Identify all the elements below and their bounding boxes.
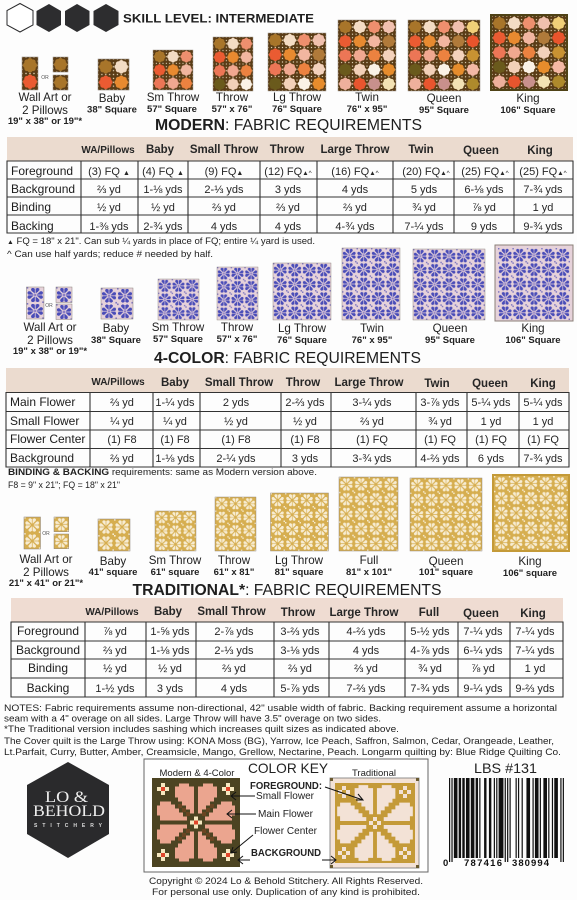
table: modern requirements: 4-¾ yds	[335, 221, 375, 233]
table: traditional requirements: WA/Pillows	[85, 607, 139, 618]
table: modern requirements: 6-⅛ yds	[464, 184, 504, 196]
copyright text: Copyright © 2024 Lo & Behold Stitchery. All Rights Reserved.	[149, 876, 423, 887]
table: 4-color requirements: ⅔ yd	[360, 416, 384, 428]
table: traditional requirements: ½ yd	[158, 663, 182, 675]
panel: color key	[144, 759, 428, 872]
table: modern requirements: ½ yd	[151, 202, 175, 214]
heading: modern: MODERN: FABRIC REQUIREMENTS	[155, 117, 422, 134]
modern quilt size row: Twin	[355, 91, 379, 104]
product code: LBS #131	[474, 760, 537, 776]
table: 4-color requirements: 2-¼ yds	[216, 453, 256, 465]
table: traditional requirements: Foreground	[17, 624, 79, 638]
traditional quilt size row: Lg Throw	[275, 554, 324, 567]
table: traditional requirements: 5-⅞ yds	[280, 683, 320, 695]
4-color quilt size row	[13, 245, 573, 357]
traditional quilt size row	[9, 474, 570, 589]
table: 4-color requirements: (1) FQ	[424, 434, 456, 446]
table: traditional requirements: 1-⅝ yds	[150, 626, 190, 638]
table: modern requirements: 2-⅓ yds	[204, 184, 244, 196]
modern block label: Modern & 4-Color	[160, 768, 234, 779]
traditional quilt size row: 106" square	[503, 568, 557, 579]
notes text block	[4, 703, 561, 757]
table: 4-color requirements: Baby	[161, 377, 190, 389]
table: 4-color requirements: 3-¾ yds	[352, 453, 392, 465]
traditional quilt size row: King	[518, 555, 542, 568]
table: 4-color requirements: ¾ yd	[428, 416, 452, 428]
table: modern requirements: Backing	[11, 219, 54, 233]
table: modern requirements: Large Throw	[320, 144, 390, 156]
modern block diagram	[152, 778, 240, 867]
table: modern requirements: 3 yds	[275, 184, 302, 196]
table: modern requirements: (20) FQ▲^	[402, 166, 451, 178]
table: traditional requirements: ⅞ yd	[103, 626, 127, 638]
table: traditional requirements: 3-⅔ yds	[280, 626, 320, 638]
table: 4-color requirements: 1-⅛ yds	[155, 453, 195, 465]
4-color quilt size row: 2 Pillows	[27, 334, 73, 347]
4-color quilt size row: 76" Square	[277, 335, 327, 346]
table: traditional requirements: 1-½ yds	[95, 683, 135, 695]
4-color quilt size row: King	[521, 322, 545, 335]
table: 4-color requirements: Queen	[472, 378, 508, 390]
modern quilt size row: Queen	[427, 92, 461, 105]
4-color quilt size row: 57" x 76"	[217, 334, 257, 345]
table: 4-color requirements: 3-¼ yds	[352, 397, 392, 409]
table: 4-color requirements: 5-¼ yds	[471, 397, 511, 409]
arrows: key pointers	[227, 787, 363, 864]
table: modern requirements	[7, 137, 573, 233]
table: modern requirements: (9) FQ▲	[205, 166, 243, 178]
icon: filled hexagons	[36, 4, 118, 32]
traditional quilt size row: Baby	[100, 555, 126, 568]
table: 4-color requirements: Main Flower	[10, 395, 75, 409]
table: 4-color requirements: ⅔ yd	[110, 397, 134, 409]
table: modern requirements: 2-¾ yds	[143, 221, 183, 233]
modern table footnotes	[7, 236, 315, 259]
table: 4-color requirements: Twin	[424, 378, 450, 390]
traditional quilt size row: Queen	[429, 555, 463, 568]
table: traditional requirements: 5-½ yds	[410, 626, 450, 638]
traditional quilt size row: Sm Throw	[149, 554, 202, 567]
table: modern requirements: Throw	[270, 144, 304, 156]
table: modern requirements: (3) FQ ▲	[88, 166, 130, 178]
table: 4-color requirements: ⅔ yd	[110, 453, 134, 465]
table: traditional requirements: Small Throw	[197, 606, 266, 618]
table: traditional requirements: 2-⅓ yds	[214, 645, 254, 657]
table: traditional requirements: 7-¼ yds	[515, 626, 555, 638]
traditional quilt size row: 101" square	[419, 567, 473, 578]
table: modern requirements: Foreground	[11, 164, 73, 178]
table: 4-color requirements: (1) F8	[290, 434, 320, 446]
notes text block: NOTES: Fabric requirements assume non-directional, 42" usable width of fabric. Backing requirement assume a horizontal	[4, 703, 557, 713]
table: 4-color requirements: (1) FQ	[527, 434, 559, 446]
traditional quilt size row: Wall Art or	[19, 553, 73, 566]
table: modern requirements: 4 yds	[211, 221, 238, 233]
table: 4-color requirements: 3-⅞ yds	[420, 397, 460, 409]
key labels: Flower Center	[254, 826, 318, 837]
copyright text	[149, 876, 423, 898]
table: modern requirements: 7-¾ yds	[523, 184, 563, 196]
skill level text: SKILL LEVEL: INTERMEDIATE	[123, 12, 314, 26]
modern quilt size row: 38" Square	[87, 104, 137, 116]
table: modern requirements: 9-¾ yds	[523, 221, 563, 233]
table: traditional requirements: 4 yds	[353, 645, 380, 657]
4-color quilt size row: Wall Art or	[23, 321, 77, 334]
traditional quilt size row: 81" square	[275, 567, 323, 578]
table: traditional requirements: 4 yds	[221, 683, 248, 695]
table: 4-color requirements: ½ yd	[293, 416, 317, 428]
modern quilt size row: 2 Pillows	[22, 104, 68, 117]
traditional quilt size row: Throw	[218, 554, 251, 567]
table: traditional requirements: 4-⅞ yds	[410, 645, 450, 657]
modern quilt size row: Wall Art or	[18, 91, 72, 104]
modern quilt size row: Sm Throw	[147, 91, 200, 104]
table: modern requirements: (16) FQ▲^	[331, 166, 380, 178]
4-color table footnotes: F8 = 9" x 21"; FQ = 18" x 21"	[8, 480, 120, 490]
table: traditional requirements: ⅔ yd	[288, 663, 312, 675]
table: modern requirements: 7-¼ yds	[404, 221, 444, 233]
modern quilt size row: Throw	[216, 91, 249, 104]
heading: traditional: TRADITIONAL*: FABRIC REQUIREMENTS	[132, 582, 442, 599]
table: modern requirements: Queen	[463, 145, 499, 157]
table: traditional requirements: 3 yds	[157, 683, 184, 695]
notes text block: Lt.Parfait, Curry, Butter, Amber, Creamsicle, Mango, Grellow, Nectarine, Peach. Longarm quilting by: Blue Ridge Quilting Co.	[4, 747, 561, 757]
table: 4-color requirements: Small Flower	[10, 414, 79, 428]
modern quilt size row: 57" x 76"	[212, 104, 252, 115]
table: 4-color requirements: King	[530, 378, 556, 390]
table: 4-color requirements: ¼ yd	[163, 416, 187, 428]
table: modern requirements: Background	[11, 182, 75, 196]
table: traditional requirements: ⅔ yd	[354, 663, 378, 675]
traditional quilt size row: 41" square	[89, 567, 137, 578]
key labels: BACKGROUND	[251, 848, 321, 859]
table: 4-color requirements: 3 yds	[292, 453, 319, 465]
table: traditional requirements: 6-¼ yds	[463, 645, 503, 657]
icon: empty hexagon	[7, 4, 33, 32]
table: 4-color requirements: 6 yds	[478, 453, 505, 465]
color key title: COLOR KEY	[248, 760, 329, 776]
modern quilt size row: 19" x 38" or 19"*	[8, 116, 82, 127]
4-color quilt size row: 76" x 95"	[352, 335, 392, 346]
modern quilt size row: King	[516, 92, 540, 105]
table: modern requirements: Small Throw	[190, 144, 258, 156]
table: 4-color requirements: 1-¼ yds	[155, 397, 195, 409]
modern quilt size row: Baby	[99, 92, 125, 105]
traditional quilt size row: 21" x 41" or 21"*	[9, 578, 83, 589]
table: traditional requirements: Large Throw	[329, 607, 399, 619]
traditional quilt size row: Full	[360, 554, 378, 567]
4-color quilt size row: Baby	[103, 322, 129, 335]
notes text block: *The Traditional version includes sashing which increases quilt sizes as indicated above.	[4, 724, 399, 734]
table: modern requirements: (4) FQ ▲	[142, 166, 184, 178]
traditional quilt size row: 61" square	[151, 567, 199, 578]
key labels: Main Flower	[258, 809, 314, 820]
table: traditional requirements: 1 yd	[525, 663, 545, 675]
modern quilt size row: 57" Square	[147, 104, 197, 115]
modern quilt size row: 95" Square	[419, 105, 469, 116]
4-color quilt size row: 19" x 38" or 19"*	[13, 346, 87, 357]
table: traditional requirements: ¾ yd	[418, 663, 442, 675]
table: 4-color requirements: Small Throw	[205, 377, 273, 389]
table: modern requirements: (25) FQ▲^	[519, 166, 568, 178]
table: 4-color requirements: (1) FQ	[475, 434, 507, 446]
table: 4-color requirements: (1) F8	[107, 434, 137, 446]
table: 4-color requirements: 4-⅔ yds	[420, 453, 460, 465]
4-color table footnotes	[8, 467, 317, 490]
table: 4-color requirements: 1 yd	[481, 416, 501, 428]
table: modern requirements: King	[527, 145, 553, 157]
logo: Lo & Behold Stitchery: LO &	[45, 789, 89, 806]
4-color quilt size row: 38" Square	[91, 335, 141, 346]
logo: Lo & Behold Stitchery: STITCHERY	[34, 823, 103, 829]
traditional quilt size row: 81" x 101"	[346, 567, 392, 578]
key labels	[250, 781, 322, 859]
table: traditional requirements: 2-⅞ yds	[214, 626, 254, 638]
table: 4-color requirements: Large Throw	[334, 377, 404, 389]
table: traditional requirements: 7-⅔ yds	[346, 683, 386, 695]
traditional block label: Traditional	[352, 768, 396, 779]
traditional quilt size row: 2 Pillows	[23, 566, 69, 579]
table: 4-color requirements: (1) FQ	[356, 434, 388, 446]
table: traditional requirements: King	[520, 608, 546, 620]
table: modern requirements: ⅞ yd	[472, 202, 496, 214]
table: modern requirements: WA/Pillows	[81, 145, 135, 156]
table: traditional requirements: 9-¼ yds	[463, 683, 503, 695]
table: modern requirements: ½ yd	[97, 202, 121, 214]
4-color quilt size row: Sm Throw	[152, 321, 205, 334]
4-color quilt size row: Queen	[433, 322, 467, 335]
key labels: Small Flower	[256, 791, 315, 802]
traditional quilt size row: 61" x 81"	[214, 567, 254, 578]
table: 4-color requirements: 2 yds	[223, 397, 250, 409]
logo: Lo & Behold Stitchery: BEHOLD	[33, 803, 105, 820]
table: modern requirements: 1 yd	[533, 202, 553, 214]
table: 4-color requirements: Flower Center	[10, 432, 85, 446]
4-color quilt size row: OR	[45, 303, 53, 309]
table: modern requirements: Twin	[408, 144, 434, 156]
modern quilt size row: 106" Square	[500, 105, 556, 116]
copyright text: For personal use only. Duplication of any kind is prohibited.	[152, 887, 420, 898]
table: 4-color requirements	[6, 368, 569, 467]
table: traditional requirements: Throw	[281, 607, 315, 619]
modern table footnotes: ▲ FQ = 18" x 21". Can sub ¼ yards in place of FQ; entire ¼ yard is used.	[7, 236, 315, 246]
modern table footnotes: ^ Can use half yards; reduce # needed by half.	[7, 249, 213, 259]
table: 4-color requirements: ½ yd	[224, 416, 248, 428]
table: modern requirements: 4 yds	[275, 221, 302, 233]
table: traditional requirements: ½ yd	[103, 663, 127, 675]
table: modern requirements: Binding	[11, 200, 51, 214]
table: traditional requirements: Queen	[463, 608, 499, 620]
table: 4-color requirements: 7-¾ yds	[523, 453, 563, 465]
table: traditional requirements: Baby	[154, 606, 183, 618]
table: modern requirements: ⅔ yd	[212, 202, 236, 214]
table: traditional requirements: 9-⅔ yds	[515, 683, 555, 695]
table: 4-color requirements: ¼ yd	[110, 416, 134, 428]
modern quilt size row: 76" Square	[272, 104, 322, 115]
table: traditional requirements: ⅔ yd	[103, 645, 127, 657]
4-color quilt size row: Throw	[221, 321, 254, 334]
barcode: 787416	[464, 858, 502, 869]
table: traditional requirements	[11, 598, 563, 697]
notes text block: The Cover quilt is the Large Throw using: KONA Moss (BG), Yarrow, Ice Peach, Saffron, Salmon, Cedar, Orangeade, Leather,	[4, 736, 554, 746]
table: modern requirements: 1-⅜ yds	[89, 221, 129, 233]
table: 4-color requirements: 5-¼ yds	[523, 397, 563, 409]
table: traditional requirements: 4-⅔ yds	[346, 626, 386, 638]
table: 4-color requirements: (1) F8	[160, 434, 190, 446]
modern quilt size row: 76" x 95"	[347, 104, 387, 115]
traditional block diagram	[330, 778, 419, 868]
barcode	[443, 778, 564, 869]
barcode: 380994	[512, 858, 550, 869]
table: 4-color requirements: WA/Pillows	[91, 377, 145, 388]
table: 4-color requirements: (1) F8	[221, 434, 251, 446]
table: traditional requirements: ⅞ yd	[471, 663, 495, 675]
table: traditional requirements: Backing	[27, 681, 69, 695]
table: traditional requirements: Full	[419, 607, 439, 619]
table: modern requirements: (12) FQ▲^	[264, 166, 313, 178]
table: modern requirements: (25) FQ▲^	[461, 166, 510, 178]
table: traditional requirements: Background	[16, 643, 80, 657]
barcode: 0	[443, 858, 448, 869]
modern quilt size row: OR	[41, 75, 49, 81]
table: traditional requirements: 7-¼ yds	[463, 626, 503, 638]
table: modern requirements: 5 yds	[411, 184, 438, 196]
table: traditional requirements: 7-¾ yds	[410, 683, 450, 695]
heading: 4-color: 4-COLOR: FABRIC REQUIREMENTS	[154, 350, 421, 367]
modern quilt size row: Lg Throw	[273, 91, 322, 104]
4-color quilt size row: 95" Square	[425, 335, 475, 346]
table: modern requirements: ⅔ yd	[343, 202, 367, 214]
4-color quilt size row: 57" Square	[153, 334, 203, 345]
4-color quilt size row: Twin	[360, 322, 384, 335]
table: modern requirements: ⅔ yd	[97, 184, 121, 196]
table: modern requirements: 4 yds	[342, 184, 369, 196]
table: traditional requirements: Binding	[28, 661, 68, 675]
4-color quilt size row: Lg Throw	[278, 322, 327, 335]
table: 4-color requirements: 1 yd	[533, 416, 553, 428]
key labels: FOREGROUND:	[250, 781, 322, 792]
table: 4-color requirements: 2-⅔ yds	[285, 397, 325, 409]
table: traditional requirements: 3-⅛ yds	[280, 645, 320, 657]
table: 4-color requirements: Background	[10, 451, 74, 465]
modern quilt size row	[8, 14, 568, 127]
4-color table footnotes: BINDING & BACKING requirements: same as Modern version above.	[8, 467, 317, 477]
table: modern requirements: ¾ yd	[412, 202, 436, 214]
logo: Lo & Behold Stitchery	[27, 762, 109, 858]
table: traditional requirements: 1-⅛ yds	[150, 645, 190, 657]
table: 4-color requirements: Throw	[286, 377, 320, 389]
4-color quilt size row: 106" Square	[505, 335, 561, 346]
table: modern requirements: ⅔ yd	[276, 202, 300, 214]
table: modern requirements: Baby	[146, 144, 175, 156]
table: modern requirements: 9 yds	[471, 221, 498, 233]
traditional quilt size row: OR	[42, 531, 50, 537]
table: traditional requirements: ⅔ yd	[222, 663, 246, 675]
table: modern requirements: 1-⅛ yds	[143, 184, 183, 196]
table: traditional requirements: 7-¼ yds	[515, 645, 555, 657]
skill level indicator	[7, 4, 314, 32]
notes text block: seam with a 4" overage on all sides. Large Throw will have 3.5" overage on two sides.	[4, 714, 381, 724]
